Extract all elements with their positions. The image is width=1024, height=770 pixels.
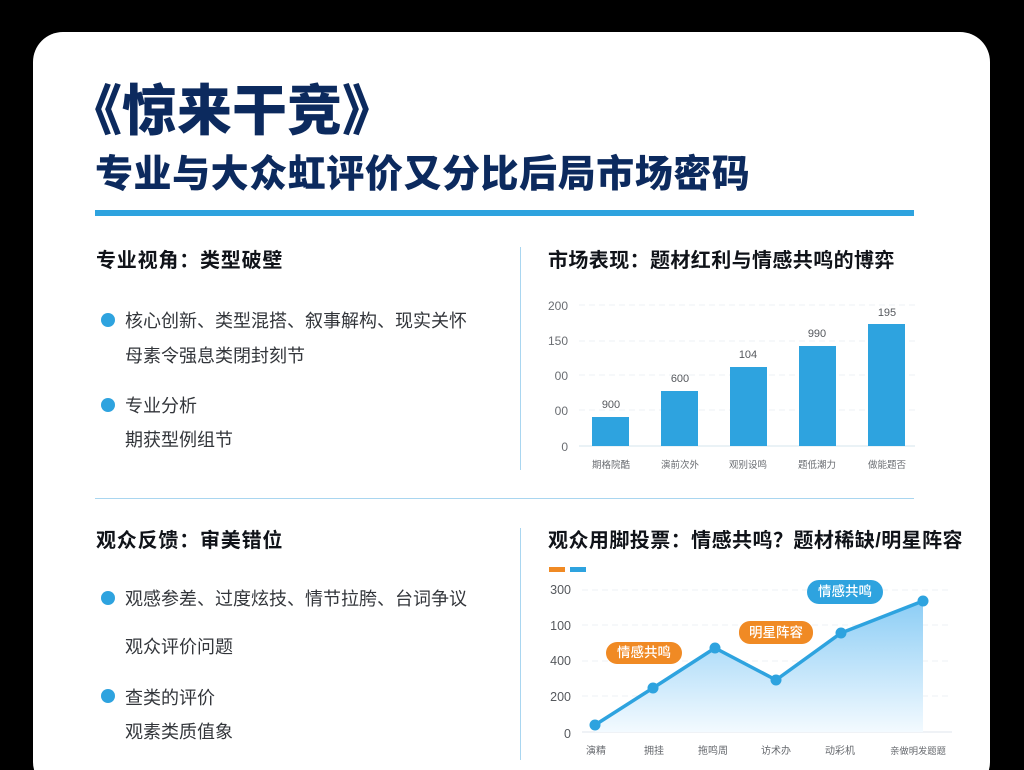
area line chart: 拖鸣周 xyxy=(698,744,728,757)
callout: orange emotional resonance: 情感共鸣 xyxy=(617,645,671,660)
callout: orange star cast: 明星阵容 xyxy=(749,625,803,640)
bullet dot 4 xyxy=(101,689,115,703)
area line chart: 访术办 xyxy=(761,744,791,757)
text: detail line 1: 母素令强息类閉封刻节 xyxy=(125,346,305,366)
bar chart: 900 xyxy=(602,399,620,411)
bar chart: 150 xyxy=(548,334,568,348)
text: detail line 2: 期获型例组节 xyxy=(125,430,233,450)
area line chart xyxy=(550,583,952,757)
text: rating line: 查类的评价 xyxy=(125,688,215,708)
bar chart: 200 xyxy=(548,299,568,313)
bar chart: 期格院酷 xyxy=(592,459,630,471)
text: audience issues: 观众评价问题 xyxy=(125,637,233,657)
bar chart: 195 xyxy=(878,307,896,319)
area line chart: 动彩机 xyxy=(825,744,855,757)
callout: blue emotional resonance xyxy=(807,580,883,604)
area line chart: 0 xyxy=(564,727,571,741)
area line chart: 200 xyxy=(550,690,571,704)
divider: vertical bottom xyxy=(520,528,521,760)
bar chart: 做能题否 xyxy=(868,459,906,471)
bullet dot 3 xyxy=(101,591,115,605)
panel: professional view xyxy=(96,250,467,450)
bar chart: 00 xyxy=(555,404,568,418)
swatch: blue xyxy=(570,567,586,572)
text: audience gap: 观感参差、过度炫技、情节拉胯、台词争议 xyxy=(125,589,467,609)
bullet dot 2 xyxy=(101,398,115,412)
callout: orange star cast xyxy=(739,621,813,644)
heading: box office voting: 观众用脚投票：情感共鸣？题材稀缺/明星阵容 xyxy=(548,530,963,552)
bar chart: 观别设鸣 xyxy=(729,459,767,471)
swatch: orange xyxy=(549,567,565,572)
text: detail line 3: 观素类质值象 xyxy=(125,722,233,742)
bar chart: 题低潮力 xyxy=(798,459,836,471)
subtitle: 专业与大众虹评价又分比后局市场密码 xyxy=(95,154,750,196)
bar chart: 600 xyxy=(671,373,689,385)
area line chart: 400 xyxy=(550,654,571,668)
heading: audience feedback: 观众反馈：审美错位 xyxy=(96,530,283,552)
bar chart: 00 xyxy=(555,369,568,383)
callout: orange emotional resonance xyxy=(606,642,682,664)
callout: blue emotional resonance: 情感共鸣 xyxy=(818,584,872,599)
divider: horizontal xyxy=(95,498,914,499)
area line chart: 100 xyxy=(550,619,571,633)
title: 《惊来干竞》 xyxy=(67,80,397,142)
bar chart: 0 xyxy=(561,440,568,454)
title rule xyxy=(95,210,914,216)
bullet dot 1 xyxy=(101,313,115,327)
divider: vertical top xyxy=(520,247,521,470)
bar chart: 104 xyxy=(739,349,757,361)
bar chart: 演前次外 xyxy=(661,459,699,471)
text: professional analysis: 专业分析 xyxy=(125,396,197,416)
text: core innovation: 核心创新、类型混搭、叙事解构、现实关怀 xyxy=(125,311,467,331)
area line chart: 亲做明发题题 xyxy=(890,745,946,756)
bar chart: 990 xyxy=(808,328,826,340)
bar chart xyxy=(548,299,915,471)
area line chart: 演精 xyxy=(586,744,606,757)
panel: audience feedback xyxy=(96,530,467,742)
area line chart: 拥挂 xyxy=(644,744,664,757)
panel: market performance heading: 市场表现：题材红利与情感共鸣的博弈 xyxy=(548,250,895,272)
area line chart: 300 xyxy=(550,583,571,597)
legend swatches xyxy=(549,567,586,572)
heading: professional view: 专业视角：类型破壁 xyxy=(96,250,283,272)
